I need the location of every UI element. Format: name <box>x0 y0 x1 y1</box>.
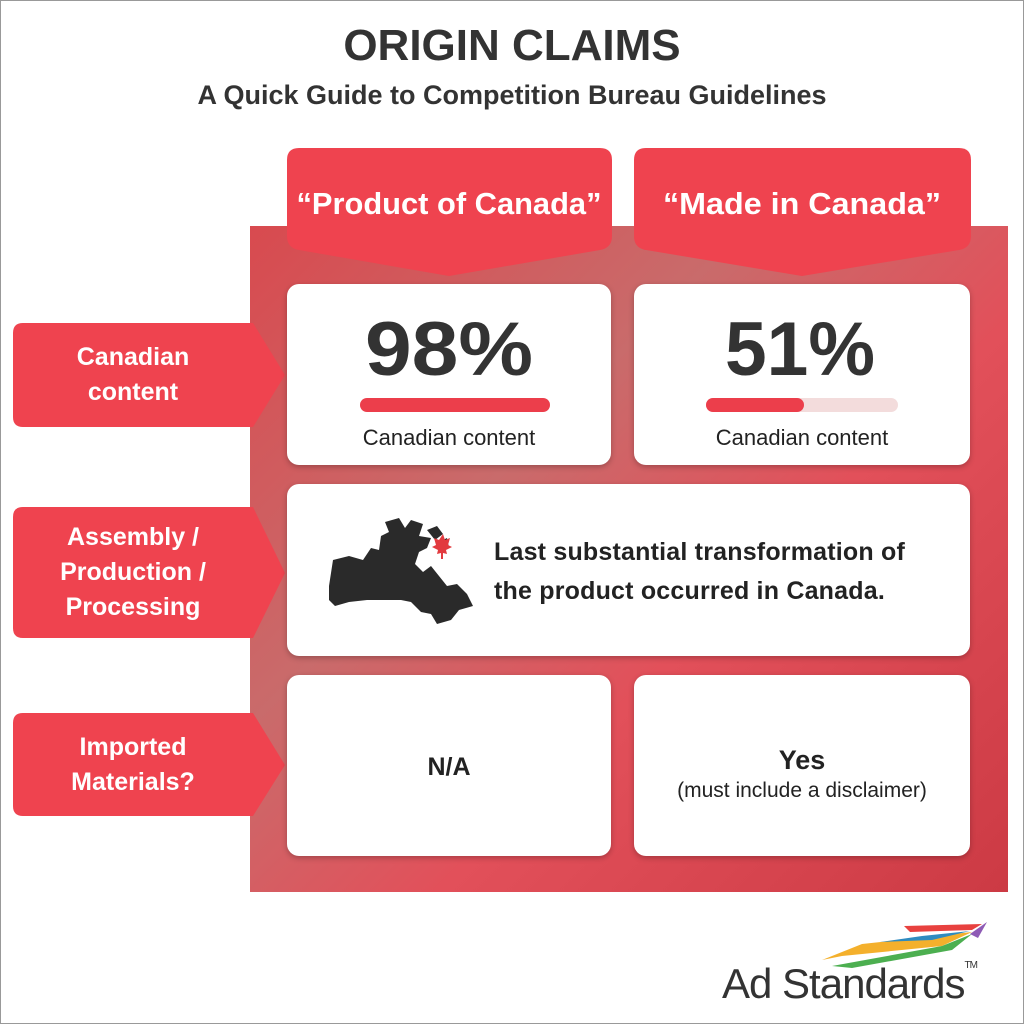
title: ORIGIN CLAIMS <box>343 21 681 70</box>
text: Processing <box>66 593 200 621</box>
card: yes: (must include a disclaimer) <box>677 779 927 802</box>
label: imported <box>13 713 285 816</box>
card: N/A <box>287 675 611 856</box>
header tab: product of canada: “Product of Canada” <box>296 186 602 221</box>
background red panel <box>250 226 1008 892</box>
text: Materials? <box>71 768 195 796</box>
subtitle: A Quick Guide to Competition Bureau Guidelines <box>197 80 827 110</box>
card: yes: Yes <box>779 745 825 775</box>
card: transformation <box>287 484 970 656</box>
header tab: product of canada <box>287 148 612 276</box>
text: Imported <box>80 732 186 760</box>
card: N/A: N/A <box>427 753 471 781</box>
card: 51%: Canadian content <box>716 425 888 450</box>
card: 51% <box>634 284 970 465</box>
icon: canada map <box>329 518 473 624</box>
card: 98%: Canadian content <box>363 425 535 450</box>
card: transformation: Last substantial transformation of <box>494 538 905 566</box>
logo: ad standards: Ad StandardsTM <box>722 960 977 1007</box>
header tab: made in canada: “Made in Canada” <box>663 186 941 221</box>
label: canadian content <box>13 323 285 427</box>
header tab: made in canada <box>634 148 971 276</box>
card: 98% <box>287 284 611 465</box>
logo: ad standards <box>722 922 987 1007</box>
text: Assembly / <box>67 523 199 551</box>
card: yes <box>634 675 970 856</box>
text: content <box>88 378 178 406</box>
text: Production / <box>60 558 206 586</box>
text: Canadian <box>77 343 189 371</box>
card: transformation: the product occurred in Canada. <box>494 577 885 605</box>
label: assembly <box>13 507 285 638</box>
